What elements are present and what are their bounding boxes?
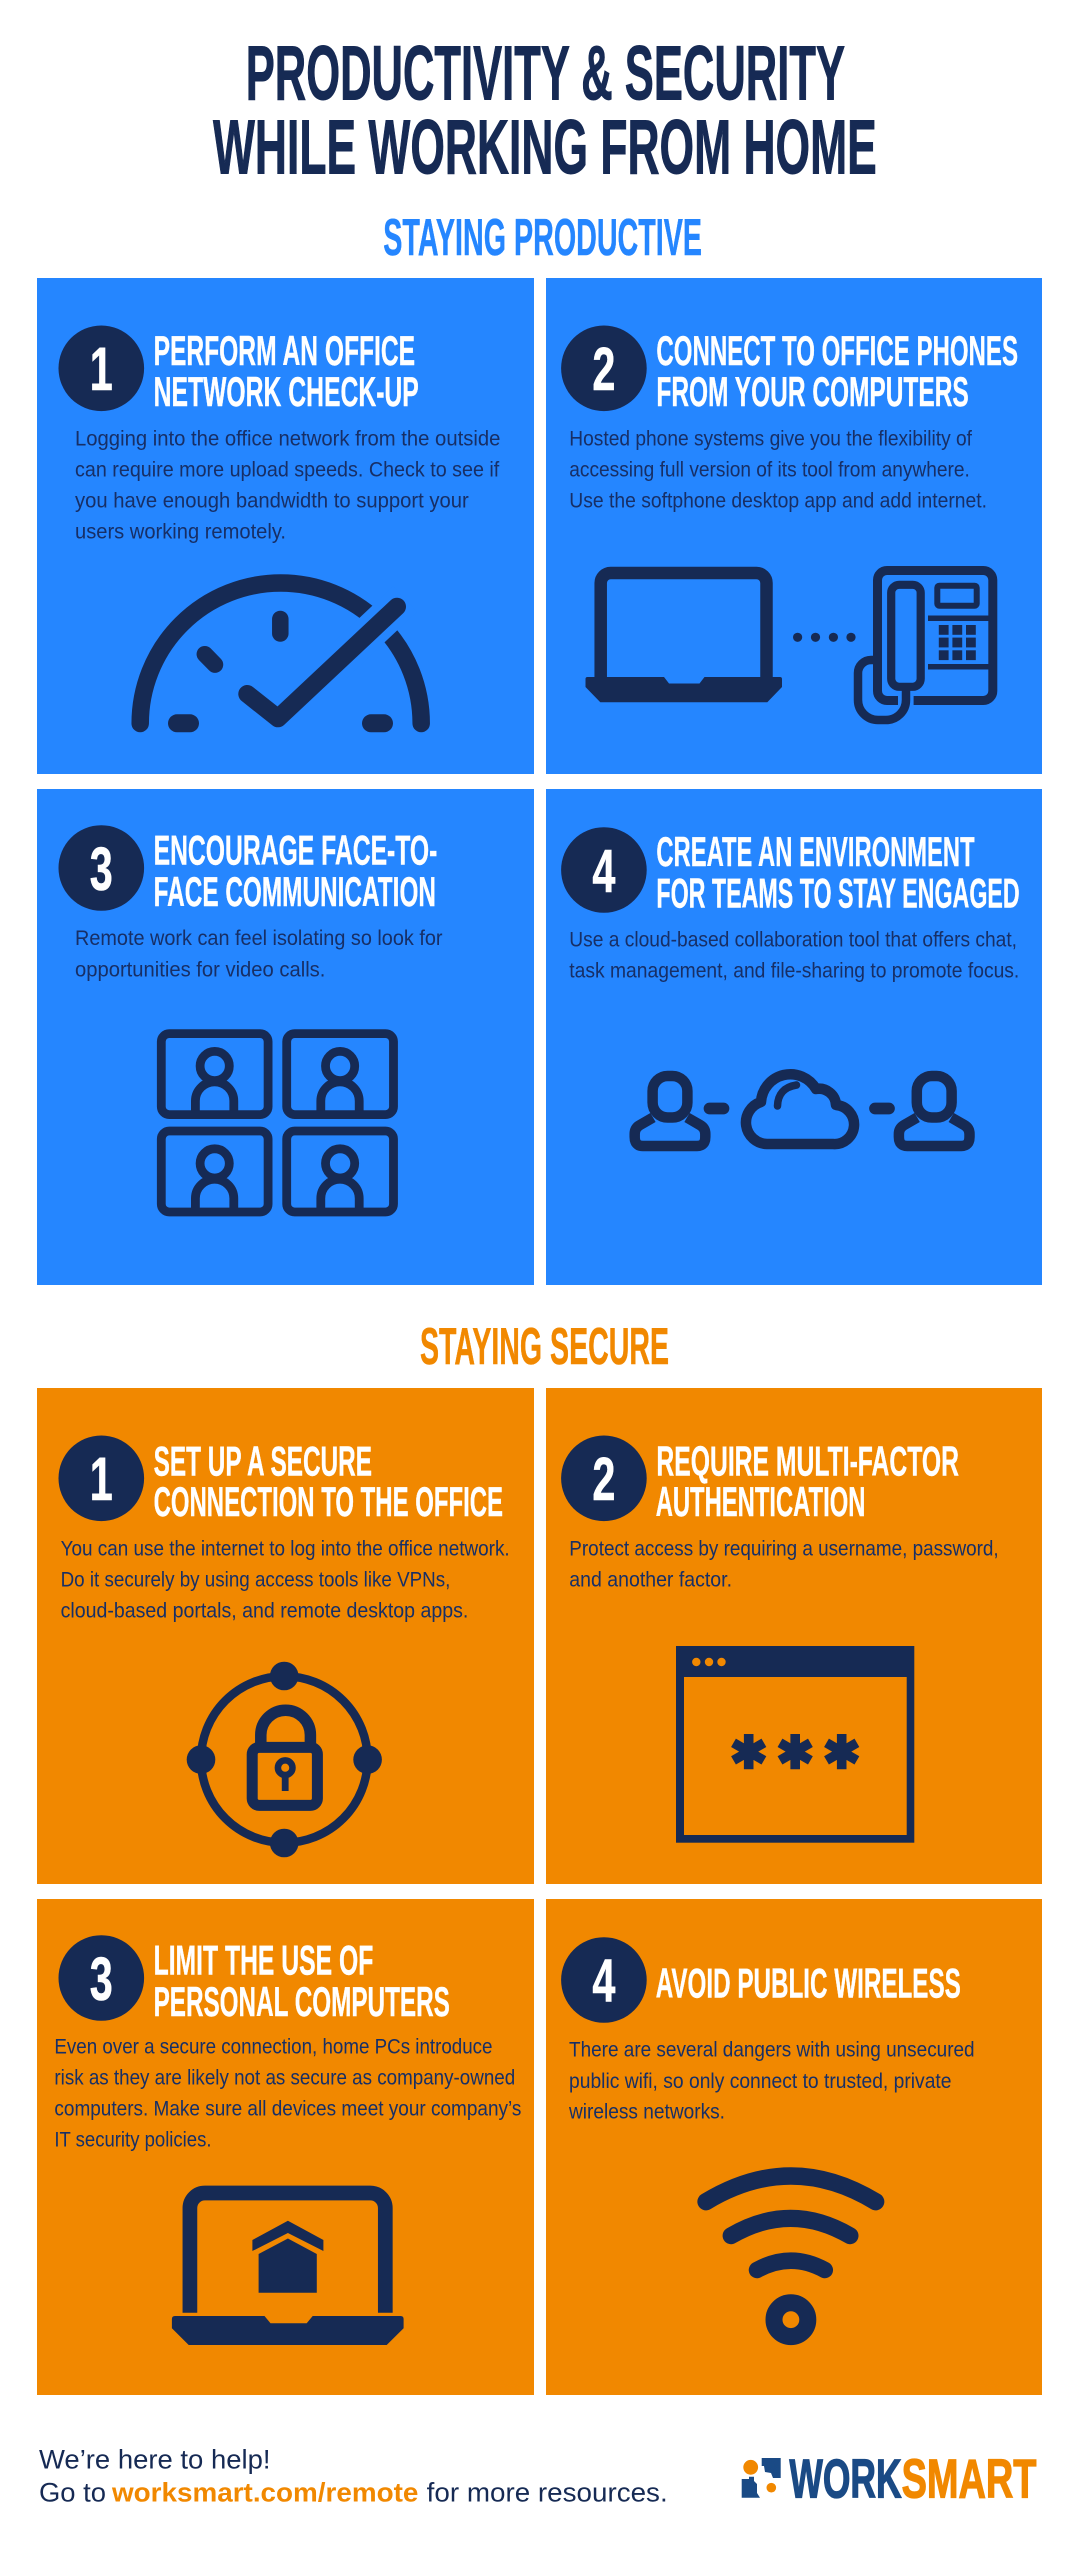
footer call to action: worksmart.com/remote <box>111 2478 418 2508</box>
panel: set up a secure connection <box>37 1388 534 1884</box>
heading: staying productive: STAYING PRODUCTIVE <box>383 209 702 267</box>
panel heading: SET UP A SECURE <box>154 1438 372 1484</box>
panel body text: Protect access by requiring a username, password, <box>569 1537 999 1560</box>
panel: connect to office phones <box>546 278 1042 774</box>
panel: avoid public wireless <box>546 1899 1042 2395</box>
panel: limit the use of personal computers <box>37 1899 534 2395</box>
title <box>213 30 877 190</box>
panel body text: computers. Make sure all devices meet your company’s <box>54 2098 521 2121</box>
panel body text <box>569 1537 999 1592</box>
panel body text: risk as they are likely not as secure as company-owned <box>54 2066 515 2089</box>
panel body text: There are several dangers with using unsecured <box>569 2039 975 2062</box>
number badge 3: 3 <box>90 835 113 903</box>
panel body text: accessing full version of its tool from anywhere. <box>569 459 970 482</box>
panel heading: PERSONAL COMPUTERS <box>154 1978 450 2025</box>
panel body text: public wifi, so only connect to trusted, private <box>569 2070 952 2093</box>
number badge 1: 1 <box>90 1445 113 1513</box>
panel heading: NETWORK CHECK-UP <box>154 368 419 415</box>
panel body text: Remote work can feel isolating so look for <box>75 927 443 950</box>
panel heading: LIMIT THE USE OF <box>154 1937 373 1984</box>
panel body text: Do it securely by using access tools like VPNs, <box>61 1569 450 1592</box>
number badge 4 <box>561 827 647 913</box>
panel body text: Use the softphone desktop app and add internet. <box>569 490 987 513</box>
number badge 3 <box>59 825 144 911</box>
panel: require multi-factor authentication <box>546 1388 1042 1884</box>
icon: password browser window <box>676 1646 914 1843</box>
number badge 3: 3 <box>90 1945 113 2013</box>
panel body text: Logging into the office network from the outside <box>75 428 500 451</box>
panel body text: Even over a secure connection, home PCs introduce <box>54 2035 493 2058</box>
panel body text <box>569 428 987 513</box>
icon: desk phone <box>858 570 993 720</box>
logo: worksmart: WORK <box>789 2448 902 2510</box>
panel body text: and another factor. <box>569 1569 732 1592</box>
panel body text <box>54 2035 521 2152</box>
number badge 4 <box>561 1937 647 2023</box>
footer call to action: for more resources. <box>427 2478 668 2508</box>
panel body text: You can use the internet to log into the office network. <box>61 1537 510 1560</box>
logo: worksmart <box>742 2448 1036 2510</box>
panel heading <box>154 327 419 415</box>
number badge 3 <box>59 1935 144 2021</box>
number badge 2: 2 <box>592 335 615 403</box>
panel heading: ENCOURAGE FACE-TO- <box>154 827 437 874</box>
footer call to action: We’re here to help! <box>39 2444 270 2474</box>
panel heading <box>656 327 1018 415</box>
panel heading: CONNECTION TO THE OFFICE <box>154 1478 503 1525</box>
panel body text <box>568 2039 975 2124</box>
panel body text: wireless networks. <box>568 2101 725 2124</box>
panel body text <box>75 927 443 981</box>
number badge 1 <box>59 1436 144 1521</box>
panel heading <box>154 827 437 915</box>
number badge 2: 2 <box>592 1445 615 1513</box>
number badge 4: 4 <box>592 837 615 905</box>
panel heading <box>656 1438 959 1525</box>
logo puzzle mark <box>742 2458 781 2498</box>
icon: video call grid <box>161 1034 394 1212</box>
icon: laptop <box>586 573 782 702</box>
panel body text: Use a cloud-based collaboration tool that offers chat, <box>569 929 1017 952</box>
connection dots <box>793 633 856 642</box>
panel body text <box>61 1537 510 1623</box>
number badge 4: 4 <box>592 1947 615 2015</box>
number badge 1: 1 <box>90 335 113 403</box>
footer call to action: Go to <box>39 2478 106 2508</box>
panel: encourage face-to-face communication <box>37 789 534 1285</box>
panel body text: users working remotely. <box>75 521 286 544</box>
panel body text: task management, and file-sharing to promote focus. <box>569 960 1019 983</box>
panel heading: AUTHENTICATION <box>656 1478 865 1525</box>
panel body text <box>569 929 1019 983</box>
number badge 2 <box>561 1436 647 1521</box>
panel heading: FACE COMMUNICATION <box>154 868 436 915</box>
panel heading: PERFORM AN OFFICE <box>154 327 415 374</box>
footer call to action <box>39 2444 668 2508</box>
panel heading <box>154 1937 450 2025</box>
panel body text: IT security policies. <box>54 2129 212 2152</box>
number badge 1 <box>59 326 144 411</box>
panel: create an environment for teams <box>546 789 1042 1285</box>
panel body text: cloud-based portals, and remote desktop apps. <box>61 1600 468 1623</box>
panel body text: opportunities for video calls. <box>75 958 325 981</box>
icon: padlock in network ring <box>187 1662 382 1857</box>
panel body text: can require more upload speeds. Check to see if <box>75 459 499 482</box>
panel heading <box>656 828 1020 917</box>
icon: wifi signal <box>706 2176 876 2337</box>
panel: perform an office network check-up <box>37 278 534 774</box>
panel heading <box>154 1438 503 1525</box>
icon: two users linked through a cloud <box>635 1074 970 1146</box>
icon: laptop with house <box>172 2193 404 2345</box>
panel body text <box>75 428 500 544</box>
number badge 2 <box>561 326 647 411</box>
icon: speed gauge with check mark <box>140 583 421 724</box>
heading: staying secure: STAYING SECURE <box>420 1318 669 1376</box>
panel body text: Hosted phone systems give you the flexibility of <box>569 428 972 451</box>
panel body text: you have enough bandwidth to support your <box>75 490 469 513</box>
